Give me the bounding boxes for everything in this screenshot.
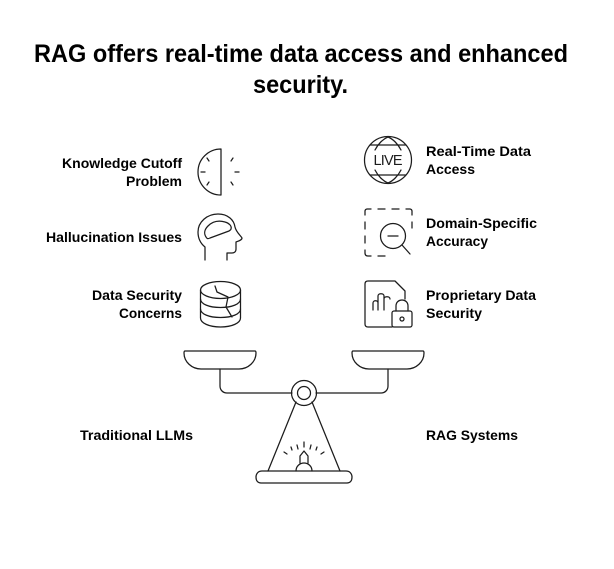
label: Domain-Specific Accuracy: Domain-Specific (426, 215, 537, 231)
icon: document chart with lock (365, 281, 412, 327)
label: Knowledge Cutoff Problem (62, 155, 182, 189)
label: RAG Systems: RAG Systems (426, 427, 518, 443)
label: Real-Time Data Access (426, 143, 531, 177)
label: Data Security Concerns: Concerns (119, 305, 182, 321)
stand (268, 402, 340, 471)
base (256, 471, 352, 483)
right pan (352, 351, 424, 369)
label: Real-Time Data Access: Access (426, 161, 475, 177)
label: Domain-Specific Accuracy: Accuracy (426, 233, 488, 249)
needle and ticks (284, 442, 324, 471)
left pan (184, 351, 256, 369)
balance scale (184, 351, 424, 483)
beam (220, 369, 388, 393)
icon: globe with LIVE (364, 136, 412, 184)
label: Proprietary Data Security: Proprietary Data (426, 287, 536, 303)
label: Hallucination Issues: Hallucination Issues (46, 229, 182, 245)
label: Proprietary Data Security (426, 287, 536, 321)
title: RAG offers real-time data access and enhanced (34, 40, 568, 68)
label: Real-Time Data Access: Real-Time Data (426, 143, 531, 159)
label: Data Security Concerns (92, 287, 182, 321)
label: Knowledge Cutoff Problem: Knowledge Cutoff (62, 155, 182, 171)
label: Domain-Specific Accuracy (426, 215, 537, 249)
icon: dashed frame with magnifier (365, 209, 412, 256)
label: Traditional LLMs: Traditional LLMs (80, 427, 193, 443)
label: Data Security Concerns: Data Security (92, 287, 182, 303)
title (34, 40, 568, 99)
label: Knowledge Cutoff Problem: Problem (126, 173, 182, 189)
icon: globe with LIVE: LIVE (374, 153, 403, 169)
icon: head with brain (198, 214, 242, 260)
label: Proprietary Data Security: Security (426, 305, 482, 321)
icon: half clock (198, 149, 239, 195)
icon: cracked database (200, 282, 240, 327)
title: security. (253, 71, 348, 99)
pivot (292, 380, 316, 406)
